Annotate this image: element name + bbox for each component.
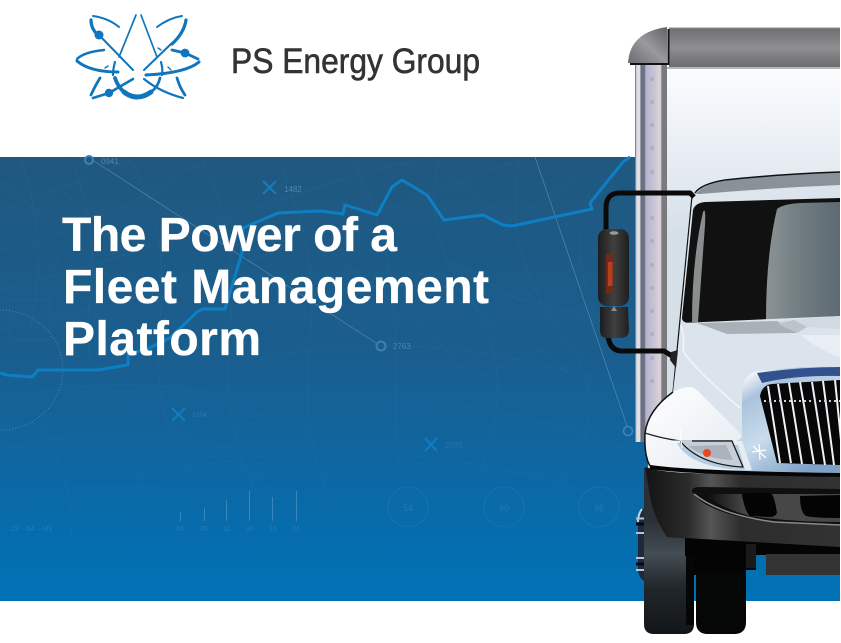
map marker: cross 1482 xyxy=(263,181,302,194)
logo: middle left orbit xyxy=(77,50,118,72)
small bar chart: 20 xyxy=(246,526,254,533)
map marker: cross 2995: 2995 xyxy=(445,441,463,450)
cab roof visor xyxy=(695,172,840,194)
title: Fleet Management xyxy=(63,261,489,314)
side mirror xyxy=(598,229,629,338)
dial: 80: 80 xyxy=(499,503,509,513)
map marker: circle 2763: 2763 xyxy=(393,342,411,351)
grille top shadow xyxy=(757,367,840,383)
small bar chart: 05 xyxy=(200,526,208,533)
map marker: cross 2995 xyxy=(425,438,463,451)
grille surround xyxy=(700,367,840,475)
right tire xyxy=(696,530,746,634)
title: Platform xyxy=(63,313,261,366)
fender xyxy=(645,387,752,470)
cargo box corner post xyxy=(635,63,667,442)
dial: 96: 96 xyxy=(594,503,604,513)
small bar chart: 04 xyxy=(176,526,184,533)
cargo box xyxy=(666,27,840,442)
dial: 54 xyxy=(388,487,428,527)
map marker: cross 1184 xyxy=(172,408,207,421)
title: The Power of a xyxy=(62,209,397,262)
headlight sparkle xyxy=(752,444,766,460)
logo xyxy=(77,15,199,98)
small bar chart xyxy=(176,491,300,533)
bumper xyxy=(645,467,840,547)
map marker: circle end xyxy=(624,426,632,436)
logo: upper right orbit xyxy=(144,16,186,70)
small bar chart: 15 xyxy=(269,526,277,533)
logo: bottom arc xyxy=(113,62,162,97)
street map lines xyxy=(10,160,599,489)
map marker: cross 1184: 1184 xyxy=(192,412,207,419)
logo: middle right orbit xyxy=(146,48,199,75)
logo: lower right orbit xyxy=(144,78,185,98)
logo: upper left orbit xyxy=(91,16,133,70)
dial: 54: 54 xyxy=(403,503,413,513)
small data label: – 23 – A4 – M3 xyxy=(5,526,52,533)
logo wordmark: PS Energy Group xyxy=(231,42,480,81)
left tire xyxy=(644,468,694,634)
title xyxy=(62,209,489,366)
left tire inner shadow xyxy=(686,535,694,625)
map marker: circle 0941 xyxy=(85,156,119,166)
rear wheels xyxy=(636,468,746,634)
wheel lugs xyxy=(636,508,644,581)
hood xyxy=(673,316,840,438)
truck illustration xyxy=(598,27,841,634)
under bumper frame xyxy=(685,538,840,575)
roof corner cap xyxy=(628,27,668,64)
logo: lower left orbit xyxy=(91,78,133,98)
dial: 96 xyxy=(579,487,619,527)
right page edge xyxy=(840,0,841,643)
lower mirror arm xyxy=(608,336,678,368)
map marker: cross 1482: 1482 xyxy=(284,185,302,194)
dotted radar arc xyxy=(0,310,63,430)
blue map banner xyxy=(0,142,841,601)
route line xyxy=(0,157,630,377)
logo: central peak xyxy=(119,15,157,57)
side mirror arm xyxy=(606,193,694,232)
windshield xyxy=(682,198,840,323)
dial: 80 xyxy=(484,487,524,527)
grille xyxy=(760,380,841,465)
thin connector lines xyxy=(94,157,627,426)
headlight xyxy=(672,428,745,470)
map marker: circle 2763 xyxy=(376,342,411,351)
door edge line xyxy=(673,196,692,392)
map marker: circle 0941: 0941 xyxy=(101,157,119,166)
small bar chart: 11 xyxy=(223,526,231,533)
small bar chart: 21 xyxy=(292,526,300,533)
cab body xyxy=(648,172,840,480)
